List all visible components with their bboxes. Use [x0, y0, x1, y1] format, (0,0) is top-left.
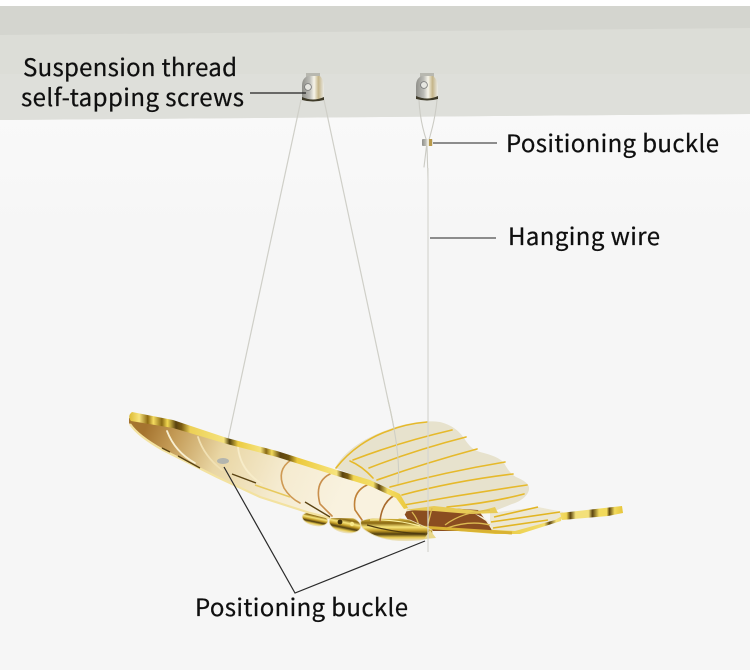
- ceiling screw right: [416, 73, 438, 100]
- top positioning buckle: [422, 139, 433, 146]
- hanging wire: [427, 168, 429, 552]
- hind wing: [445, 506, 623, 534]
- ceiling: [0, 0, 750, 120]
- label: self-tapping screws: self-tapping screws: [21, 78, 244, 113]
- gold wing rim: [129, 412, 408, 509]
- ceiling screw left: [302, 73, 324, 102]
- right suspension wire over back wing: [388, 400, 399, 484]
- suspension wires and buckle hardware: [224, 100, 437, 484]
- left suspension wire: [224, 100, 301, 458]
- back wing: [335, 421, 529, 513]
- leader line: bottom buckles: [224, 467, 425, 593]
- label: suspension thread: Suspension thread: [23, 48, 237, 83]
- label: positioning buckle bottom: Positioning buckle: [195, 588, 408, 623]
- butterfly body: [301, 510, 436, 541]
- wing buckle: [217, 458, 229, 464]
- leader line: screws: [250, 92, 306, 94]
- leader line: top buckle: [433, 142, 497, 144]
- lower edge of wing: [130, 424, 330, 518]
- brown underside of lower wing: [403, 506, 512, 533]
- hind wing gold rim: [560, 506, 623, 520]
- wing ribs: [167, 431, 395, 521]
- front wing: [129, 412, 408, 521]
- hanging wire loop: [419, 100, 437, 180]
- right suspension wire: [324, 100, 399, 484]
- leader line: hanging wire: [430, 237, 496, 239]
- label: hanging wire: Hanging wire: [508, 217, 660, 252]
- label: positioning buckle top: Positioning buckle: [506, 124, 719, 159]
